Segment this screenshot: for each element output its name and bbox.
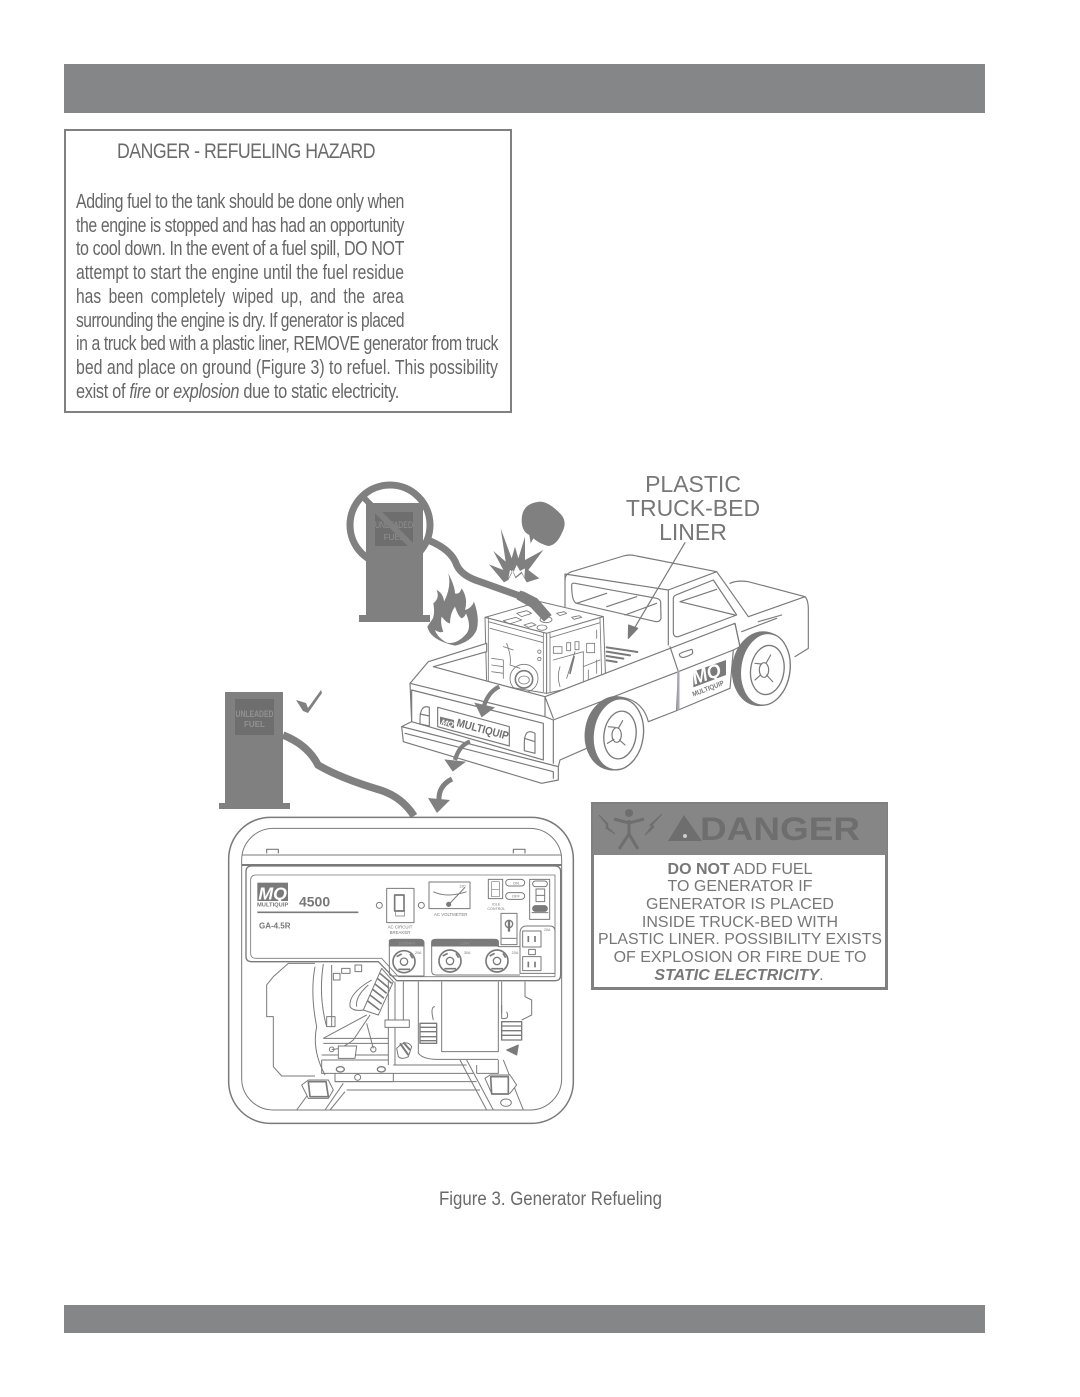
- operation switch: [530, 879, 550, 919]
- rounded frame: [229, 817, 573, 1123]
- 120/240V receptacle: 120/240V: [398, 940, 416, 945]
- pump screen: [375, 512, 413, 546]
- idle control switch: IDLE: [492, 903, 501, 907]
- 120V receptacles: 20A: [512, 951, 519, 955]
- pump screen label: UNLEADED: [375, 520, 413, 530]
- pump screen label line 2: FUEL: [244, 720, 265, 729]
- pump body: [359, 503, 430, 622]
- panel: danger refueling hazard: [65, 130, 511, 412]
- arrow: tailgate to ground: [444, 742, 470, 772]
- sign body text: OF EXPLOSION OR FIRE DUE TO: [614, 949, 866, 966]
- danger warning sign: [592, 804, 887, 988]
- panel body text: the engine is stopped and has had an opportunity: [76, 215, 404, 237]
- 120V receptacles: [432, 939, 520, 975]
- icon: explosion core: [508, 565, 525, 578]
- AC circuit breaker: BREAKER: [390, 930, 410, 935]
- pump screen: [235, 699, 274, 735]
- idle control switch: OFF: [512, 894, 521, 899]
- panel body text: [76, 191, 499, 403]
- MQ logo: MULTIQUIP: [257, 902, 289, 908]
- fuel pump allowed: [219, 690, 322, 809]
- pump body: [219, 692, 290, 809]
- pump screen label line 2: FUEL: [384, 533, 405, 542]
- panel heading: DANGER - REFUELING HAZARD: [117, 140, 375, 163]
- generator on ground: [229, 817, 573, 1123]
- label: plastic truck-bed liner: PLASTIC: [645, 471, 741, 497]
- panel body text: bed and place on ground (Figure 3) to refuel. This possibility: [76, 357, 498, 379]
- top header bar: [64, 64, 985, 113]
- top plate: [242, 853, 562, 856]
- hose nozzle: [517, 591, 552, 622]
- label: plastic truck-bed liner: TRUCK-BED: [626, 495, 760, 521]
- idle control switch: ON: [513, 880, 519, 885]
- model name: GA-4.5R: [259, 922, 291, 931]
- truck cab and hood: [565, 555, 808, 657]
- sign body text: DO NOT ADD FUEL: [668, 861, 813, 878]
- arrow: bed to tailgate: [474, 687, 499, 717]
- panel body text: attempt to start the engine until the fuel residue: [76, 262, 404, 284]
- icon: explosion: [489, 528, 543, 582]
- label: plastic truck-bed liner: [626, 471, 760, 545]
- label: plastic truck-bed liner: LINER: [659, 519, 727, 545]
- fuel pump prohibited: [350, 485, 430, 622]
- model number: 4500: [299, 894, 330, 910]
- front wheel: [728, 628, 795, 709]
- sign header band: [593, 804, 887, 855]
- AC circuit breaker: [376, 888, 424, 935]
- bed liner floor: [607, 647, 637, 662]
- door logo: MULTIQUIP: [692, 680, 725, 699]
- figure caption: Figure 3. Generator Refueling: [439, 1189, 662, 1210]
- sign body text: INSIDE TRUCK-BED WITH: [642, 914, 838, 931]
- 120/240V receptacle: 20A: [415, 951, 422, 955]
- tailgate logo text: MULTIQUIP: [455, 717, 510, 743]
- icon: check mark: [296, 690, 322, 713]
- tailgate MQ logo: MQ: [440, 717, 455, 729]
- wavy fuel hose to generator in truck: [429, 541, 520, 596]
- sign body text: STATIC ELECTRICITY.: [654, 967, 824, 984]
- fuel hose to ground generator: [283, 735, 414, 816]
- icon: electrocuted figure: [599, 809, 662, 849]
- sign body text: PLASTIC LINER. POSSIBILITY EXISTS: [598, 931, 882, 948]
- 120V receptacles: 30A: [464, 951, 471, 955]
- 120V receptacles: 120V: [460, 940, 470, 945]
- icon: static shock tag: [522, 502, 565, 546]
- idle control switch: CONTROL: [487, 907, 505, 911]
- panel body text: exist of fire or explosion due to static electricity.: [76, 381, 399, 403]
- pump screen label: UNLEADED: [236, 709, 274, 719]
- sign body text: TO GENERATOR IF: [668, 878, 813, 895]
- sign body text: [598, 861, 882, 984]
- door logo: MQ: [689, 659, 724, 688]
- truck illustration with generator in bed: [402, 502, 808, 783]
- AC voltmeter: 120: [459, 883, 466, 888]
- 20A outlets panel: 20A: [544, 928, 551, 932]
- arrow: down to generator on ground: [428, 779, 452, 813]
- panel body text: has been completely wiped up, and the area: [76, 285, 404, 307]
- icon: flame: [427, 573, 478, 646]
- truck bed and tailgate: [402, 623, 740, 783]
- generator in truck bed: [485, 602, 606, 693]
- sign heading: DANGER: [700, 811, 860, 847]
- control panel: [246, 866, 561, 981]
- MQ logo: MQ: [258, 883, 287, 903]
- AC voltmeter: AC VOLTMETER: [434, 912, 467, 917]
- icon: warning triangle: [668, 815, 702, 841]
- panel body text: Adding fuel to the tank should be done only when: [76, 191, 404, 213]
- 20A outlets panel: [520, 926, 555, 973]
- rear wheel: [581, 693, 648, 774]
- 120/240V receptacle: [389, 939, 424, 976]
- sign body text: GENERATOR IS PLACED: [646, 896, 834, 913]
- engine and frame: [267, 963, 532, 1110]
- AC voltmeter: [429, 882, 470, 917]
- idle control switch: [487, 879, 525, 911]
- bottom footer bar: [64, 1305, 985, 1333]
- panel body text: to cool down. In the event of a fuel spill, DO NOT: [76, 238, 404, 260]
- liner leader arrow: [628, 543, 685, 638]
- model divider: [257, 910, 358, 915]
- voltage selector: [501, 913, 517, 945]
- AC circuit breaker: AC CIRCUIT: [388, 925, 413, 930]
- prohibition sign: [350, 485, 430, 565]
- panel body text: surrounding the engine is dry. If generator is placed: [76, 310, 404, 332]
- panel body text: in a truck bed with a plastic liner, REMOVE generator from truck: [76, 333, 499, 355]
